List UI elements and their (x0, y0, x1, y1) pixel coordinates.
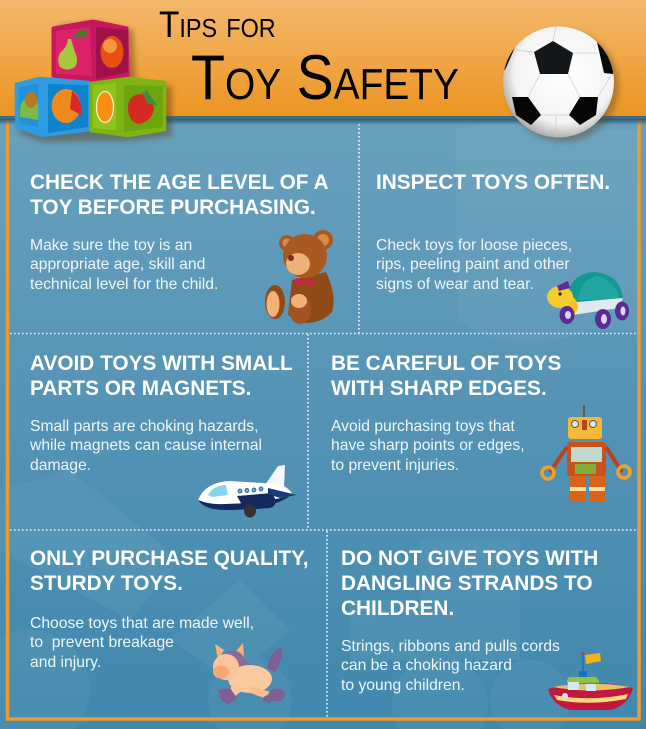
heading: WITH SHARP EDGES. (331, 377, 547, 400)
icon: toy robot (542, 405, 630, 502)
panel: quality toys (30, 547, 308, 671)
body text: Strings, ribbons and pulls cords (341, 638, 560, 655)
icon: toy pony (213, 643, 285, 705)
heading: DANGLING STRANDS TO (341, 572, 592, 595)
heading (331, 352, 561, 400)
body text: rips, peeling paint and other (376, 256, 570, 273)
heading: TOY BEFORE PURCHASING. (30, 196, 316, 219)
body text (30, 237, 218, 293)
body text: signs of wear and tear. (376, 276, 534, 293)
body text: have sharp points or edges, (331, 437, 525, 454)
dotted dividers (10, 124, 637, 718)
heading: INSPECT TOYS OFTEN. (376, 171, 610, 194)
heading: CHECK THE AGE LEVEL OF A (30, 171, 328, 194)
body text: can be a choking hazard (341, 657, 512, 674)
heading (30, 352, 293, 400)
heading: CHILDREN. (341, 597, 454, 620)
heading: PARTS OR MAGNETS. (30, 377, 251, 400)
body text: to young children. (341, 677, 465, 694)
title line: tips for: Tips for (159, 4, 276, 45)
body text: Small parts are choking hazards, (30, 418, 258, 435)
panel: inspect toys (376, 171, 610, 293)
icon: toy blocks (16, 21, 172, 142)
body text: to prevent breakage (30, 634, 174, 651)
body text (30, 615, 254, 671)
icon: toy boat (548, 652, 633, 710)
body text: while magnets can cause internal (30, 437, 262, 454)
icon: toy turtle (547, 272, 629, 329)
body text: appropriate age, skill and (30, 256, 205, 273)
heading: STURDY TOYS. (30, 572, 183, 595)
body text (376, 237, 572, 293)
heading (30, 171, 328, 219)
body text: Make sure the toy is an (30, 237, 192, 254)
body text: Choose toys that are made well, (30, 615, 254, 632)
icon: soccer ball (498, 26, 619, 142)
heading: DO NOT GIVE TOYS WITH (341, 547, 598, 570)
heading: AVOID TOYS WITH SMALL (30, 352, 293, 375)
body text (341, 638, 560, 694)
heading (30, 547, 308, 595)
icon: teddy bear (265, 230, 334, 324)
header band (0, 119, 646, 125)
body text: to prevent injuries. (331, 457, 459, 474)
title (159, 4, 459, 113)
heading: BE CAREFUL OF TOYS (331, 352, 561, 375)
panel: dangling strands (341, 547, 598, 694)
heading (341, 547, 598, 620)
body text: and injury. (30, 654, 101, 671)
title line: toy safety: Toy Safety (191, 43, 459, 113)
heading: ONLY PURCHASE QUALITY, (30, 547, 308, 570)
panel: small parts (30, 352, 293, 474)
body text: technical level for the child. (30, 276, 218, 293)
body text: Check toys for loose pieces, (376, 237, 572, 254)
panel: sharp edges (331, 352, 561, 474)
panel: check the age level (30, 171, 328, 293)
icon: toy airplane (198, 465, 297, 518)
body text (30, 418, 262, 474)
body text (331, 418, 525, 474)
body text: damage. (30, 457, 91, 474)
body text: Avoid purchasing toys that (331, 418, 515, 435)
